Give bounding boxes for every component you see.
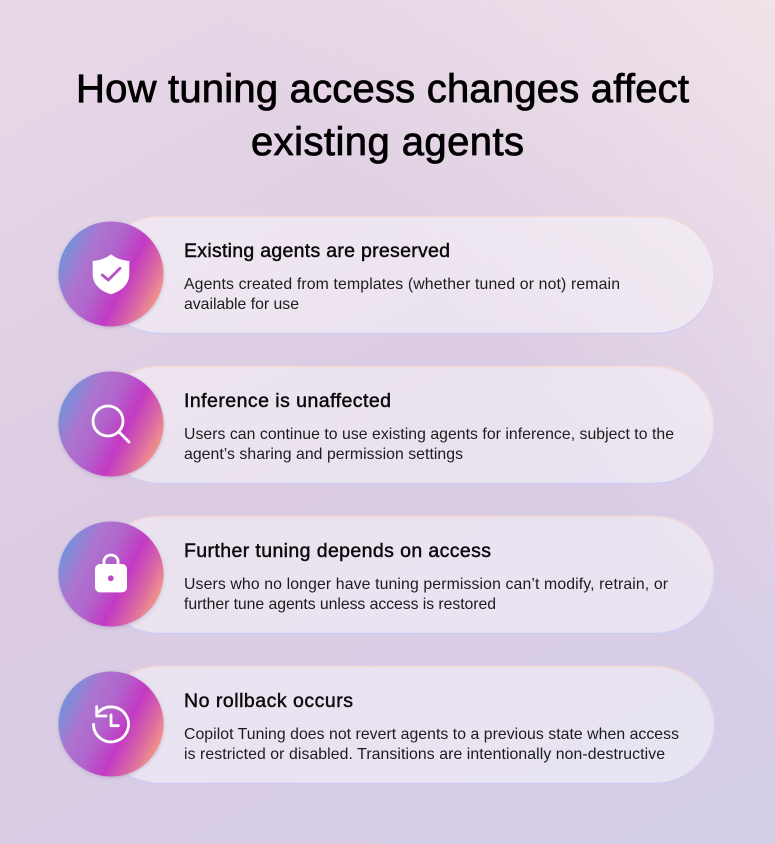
description: Users who no longer have tuning permission can’t modify, retrain, or bbox=[184, 576, 668, 593]
panel: existing agents are preserved bbox=[58, 216, 714, 334]
pill card bbox=[100, 216, 714, 334]
icon: history clock bbox=[58, 672, 164, 778]
description: is restricted or disabled. Transitions are intentionally non-destructive bbox=[184, 746, 665, 763]
heading: No rollback occurs bbox=[184, 690, 353, 712]
description: Copilot Tuning does not revert agents to a previous state when access bbox=[184, 726, 679, 743]
description: available for use bbox=[184, 296, 299, 313]
panel: inference is unaffected bbox=[58, 366, 714, 484]
title bbox=[76, 67, 689, 164]
pill card bbox=[100, 666, 714, 784]
icon: shield with check bbox=[58, 222, 164, 328]
icon: padlock bbox=[58, 522, 164, 628]
description: Agents created from templates (whether tuned or not) remain bbox=[184, 276, 620, 293]
heading: Existing agents are preserved bbox=[184, 240, 450, 262]
title: How tuning access changes affect bbox=[76, 67, 689, 111]
description: Users can continue to use existing agents for inference, subject to the bbox=[184, 426, 674, 443]
pill card bbox=[100, 516, 714, 634]
heading: Further tuning depends on access bbox=[184, 540, 491, 562]
pill card bbox=[100, 366, 714, 484]
description: agent’s sharing and permission settings bbox=[184, 446, 463, 463]
description: further tune agents unless access is restored bbox=[184, 596, 496, 613]
heading: Inference is unaffected bbox=[184, 390, 391, 412]
title: existing agents bbox=[251, 120, 524, 164]
icon: magnifying glass bbox=[58, 372, 164, 478]
panel: further tuning depends on access bbox=[58, 516, 714, 634]
panel: no rollback occurs bbox=[58, 666, 714, 784]
